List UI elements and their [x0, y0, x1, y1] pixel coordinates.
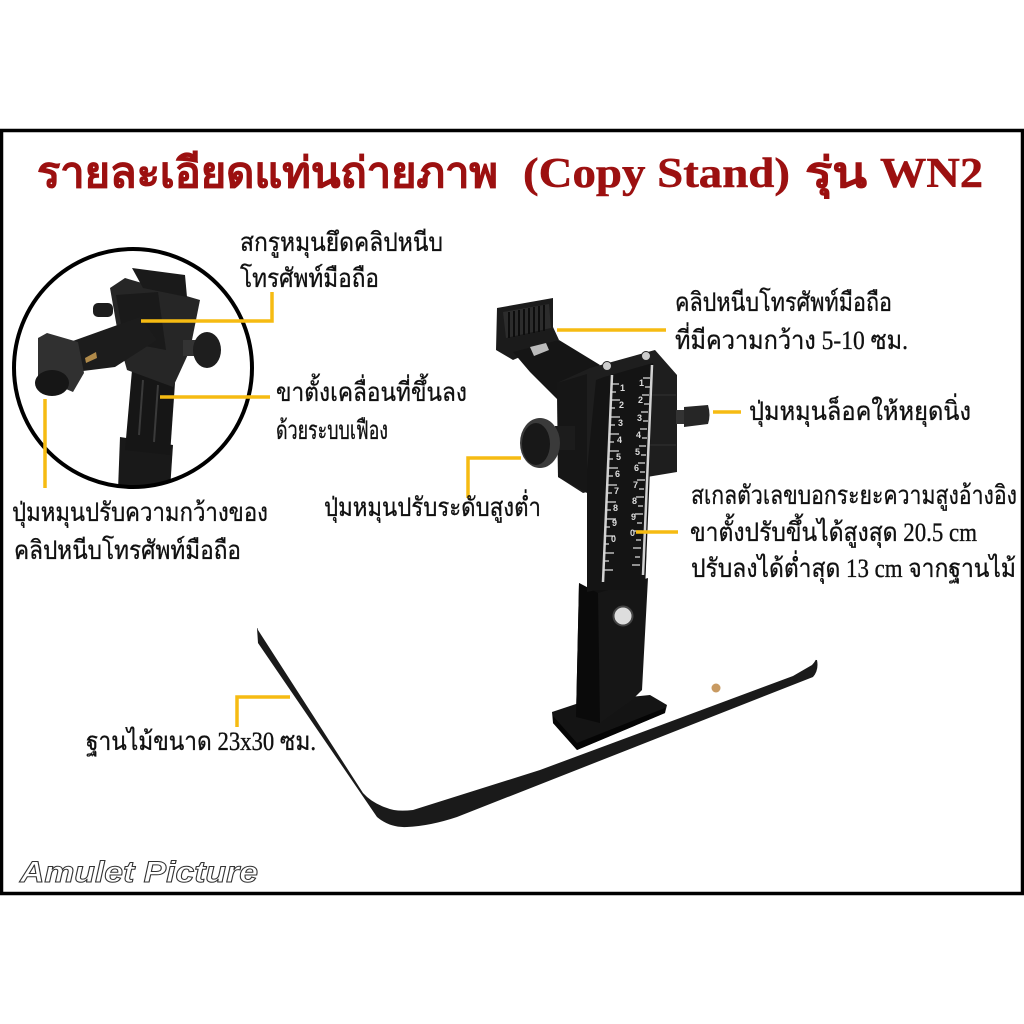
- label: height knob: ปุ่มหมุนปรับระดับสูงต่ำ: [324, 489, 541, 523]
- rail numbers: 8: [613, 503, 618, 513]
- label: scale: [690, 481, 1017, 584]
- label: base: ฐานไม้ขนาด 23x30 ซม.: [86, 726, 316, 757]
- column knob: [614, 606, 632, 626]
- lower column: [576, 578, 648, 723]
- rail numbers: 2: [619, 400, 624, 410]
- detail small knob: [93, 303, 113, 317]
- rail numbers: 4: [617, 435, 622, 445]
- panel: main stand photo: [496, 298, 710, 750]
- callout lines: [45, 292, 741, 727]
- rail numbers: 1: [639, 378, 644, 388]
- phone clip: [496, 298, 559, 360]
- label: clip: คลิปหนีบโทรศัพท์มือถือ: [675, 287, 892, 317]
- label: screw: โทรศัพท์มือถือ: [240, 263, 379, 293]
- title: (Copy Stand): [523, 151, 790, 197]
- rail: [587, 363, 653, 592]
- rail numbers: 0: [630, 528, 635, 538]
- panel: base board: [257, 520, 818, 827]
- label: scale: ขาตั้งปรับขึ้นได้สูงสุด 20.5 cm: [690, 513, 977, 548]
- watermark: Amulet Picture: [19, 856, 258, 889]
- label: width knob: ปุ่มหมุนปรับความกว้างของ: [12, 498, 268, 528]
- rail numbers: 3: [637, 413, 642, 423]
- rail numbers: 7: [633, 480, 638, 490]
- label: lock knob: ปุ่มหมุนล็อคให้หยุดนิ่ง: [749, 393, 971, 427]
- left knob: [555, 426, 575, 450]
- carriage block: [557, 350, 677, 493]
- rail ticks: [603, 378, 650, 570]
- upper rail lower part: [587, 470, 650, 595]
- title: รายละเอียดแท่นถ่ายภาพ: [37, 150, 498, 197]
- title: [37, 150, 983, 199]
- title: รุ่น: [805, 151, 867, 199]
- label: gear: ขาตั้งเคลื่อนที่ขึ้นลง: [276, 373, 467, 407]
- label: gear: [276, 373, 467, 445]
- rail numbers: 5: [616, 452, 621, 462]
- rail numbers: 2: [638, 395, 643, 405]
- label: gear: ด้วยระบบเฟือง: [276, 416, 388, 445]
- label: width knob: [12, 498, 268, 565]
- detail right knob: [183, 340, 197, 356]
- detail arm and clip: [70, 317, 157, 372]
- label: screw: [240, 228, 443, 293]
- panel: detail circle: [14, 249, 252, 490]
- rail numbers: 7: [614, 486, 619, 496]
- label: screw: สกรูหมุนยึดคลิปหนีบ: [240, 228, 443, 258]
- rail numbers: 9: [631, 512, 636, 522]
- rail numbers: 9: [612, 518, 617, 528]
- rail numbers: 5: [635, 447, 640, 457]
- label: width knob: คลิปหนีบโทรศัพท์มือถือ: [14, 535, 241, 565]
- detail block: [110, 278, 200, 387]
- rail numbers: 6: [615, 469, 620, 479]
- rail numbers: [611, 378, 644, 544]
- rail numbers: 3: [618, 418, 623, 428]
- stand foot: [552, 695, 667, 750]
- rail screws: [602, 362, 612, 370]
- title: WN2: [880, 151, 983, 197]
- right knob: [676, 410, 685, 424]
- rail numbers: 0: [611, 534, 616, 544]
- label: clip: ที่มีความกว้าง 5-10 ซม.: [675, 322, 908, 355]
- label: clip: [675, 287, 908, 355]
- frame: [2, 130, 1022, 894]
- rail numbers: 8: [632, 496, 637, 506]
- rail numbers: 1: [620, 383, 625, 393]
- rail numbers: 6: [634, 463, 639, 473]
- rail numbers: 4: [636, 430, 641, 440]
